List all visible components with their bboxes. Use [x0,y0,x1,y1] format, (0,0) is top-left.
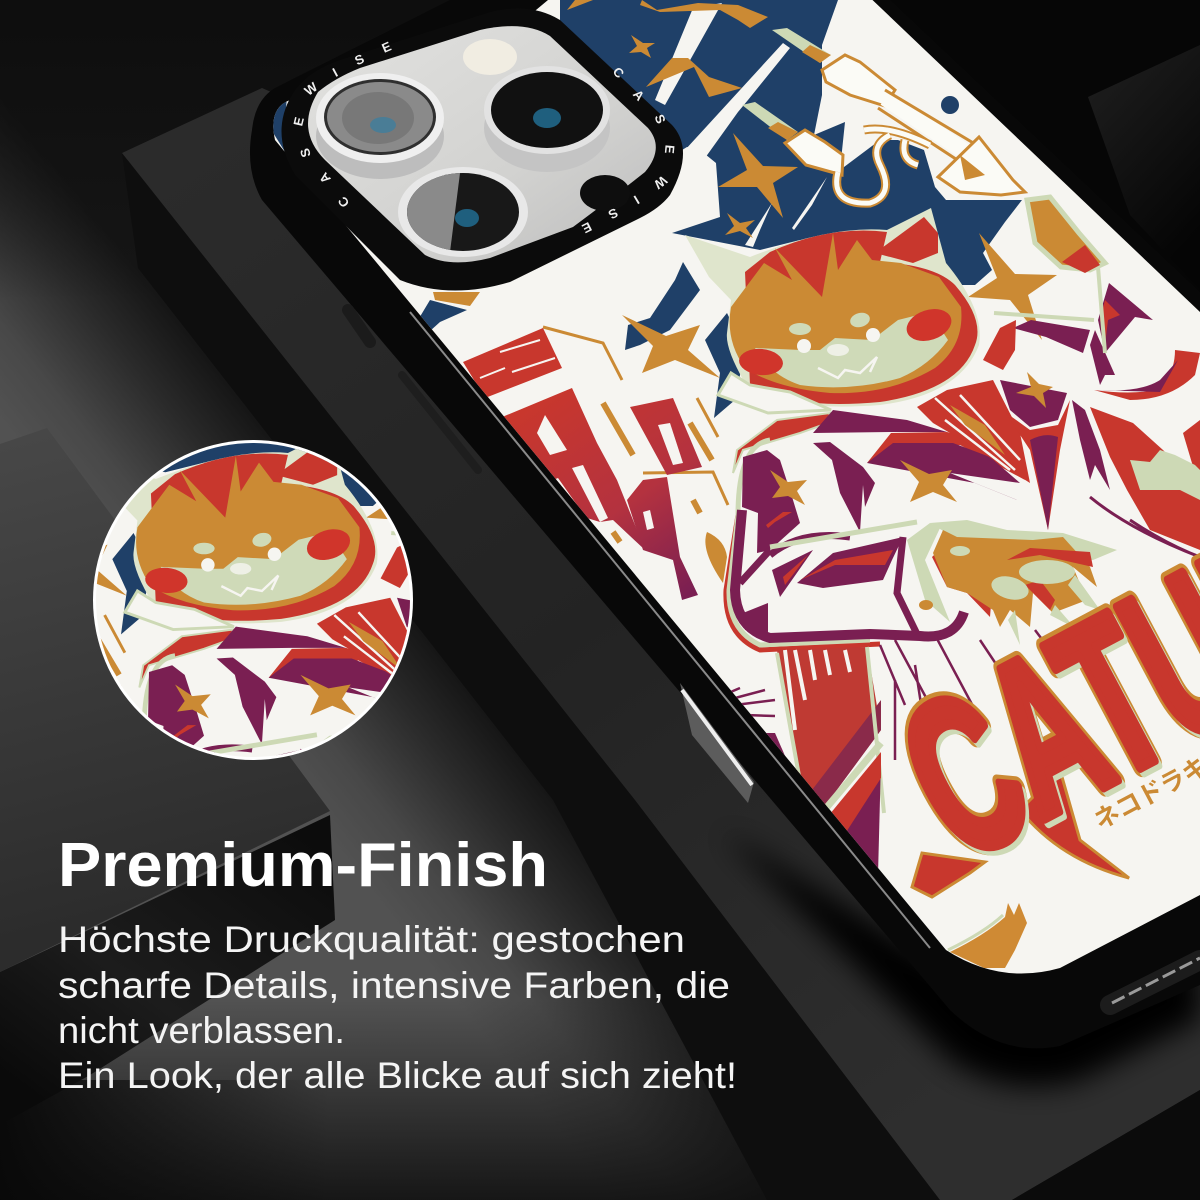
lower step top [0,428,330,972]
side button highlight [682,690,752,785]
cuff line [897,537,917,634]
lens right [484,66,610,172]
hand red fingers [1007,548,1093,610]
sleeve top right [1027,197,1105,270]
castle lower wall [495,388,645,550]
wing star [900,460,957,502]
bottom shading [0,1000,1200,1200]
castle red top [463,328,562,398]
chest red [1005,400,1070,530]
arm cream outline [729,440,870,645]
purple side strip [1072,400,1110,490]
curl navy hole [941,96,959,114]
magnifier circle [0,221,818,1196]
arch [537,415,567,455]
forearm [797,537,903,588]
tower slot [658,423,683,465]
castle [463,327,728,600]
hand red [932,540,993,617]
ribbon purple [1095,360,1178,392]
lower step front [0,815,335,1125]
action button [348,310,370,342]
orange band under island [433,292,480,306]
phone [250,0,1200,1015]
cream face [755,312,948,387]
brand text left: CASEWISE [294,42,392,207]
printed artwork [260,0,1200,1000]
top shading [0,0,1200,300]
ribbons [837,129,930,203]
cat head [685,208,980,407]
hand cream patches [950,546,1100,645]
island glass [308,26,656,262]
wall slits [556,465,608,522]
chest purple [1000,380,1067,427]
ribbon [1094,350,1200,400]
head outline with ears [685,208,980,407]
skirt purple left [745,733,800,790]
brand text right: CASEWISE [582,68,674,234]
sleeve star [770,470,807,505]
candles [742,28,831,140]
upper arm purple [742,450,800,553]
C tail [912,853,985,897]
navy blades beside head [625,262,745,418]
left bottom shading [0,1080,330,1200]
goblets [785,55,895,175]
arm red accent [766,512,792,528]
cream diagonal [822,743,881,813]
collar [718,373,831,413]
skirt rays [880,610,1135,760]
navy left patch [267,97,467,340]
frame highlight line [410,312,930,948]
charging port [1110,958,1200,1005]
white base [260,0,1200,1000]
right block top [1088,45,1200,290]
sleeve center [813,442,875,532]
sleeve red [1062,245,1100,273]
purple wing [867,443,1037,508]
red fringe [983,320,1016,370]
eyes [789,311,880,353]
orange drips [567,0,768,97]
hand cream top [930,520,1117,560]
gold blob [705,532,727,583]
silver side button [680,683,754,803]
elbow red [783,555,808,585]
heading: Premium-Finish [58,831,548,900]
title lettering [867,448,1200,909]
flash [463,39,517,75]
red wing [867,432,1025,480]
orange fur [730,233,961,393]
body text [58,919,737,1096]
cape lines [1090,497,1200,557]
candelabra [742,28,1025,203]
shoulder purple [813,410,947,433]
candelabra base [938,137,1025,195]
skirt purple right [843,760,881,875]
elbow triangle [743,603,768,632]
elbow inner [772,550,813,597]
candle ends [768,45,831,140]
A tail [1020,770,1129,878]
feather detail [935,395,1020,470]
whiskers left [712,688,775,716]
arm folds [740,535,850,583]
bottom right dark corner [1012,1090,1200,1200]
lens bottom [398,167,528,257]
stars [622,35,1057,378]
tower [630,398,702,475]
camera island [282,10,683,290]
upper arm red [733,413,830,473]
body text: Höchste Druckqualität: gestochen [58,919,685,960]
mouth [818,357,877,378]
red diagonal [825,752,881,837]
forearm cream top [770,522,917,547]
cuff dot [919,600,933,610]
purple spike right [1098,283,1153,353]
forearm red [800,550,893,580]
left cheek [738,347,784,377]
tail cream line [948,915,1003,950]
stem [880,94,893,108]
gold bars [603,403,712,542]
brick lines [480,340,555,378]
skirt cream edges [777,647,884,813]
magnifier white disc [93,440,413,760]
cape red [1090,407,1200,550]
white paint strips [655,3,827,247]
arm purple outline [735,510,964,638]
feather hand [917,380,1030,483]
nose [827,344,849,356]
small purple spike [1090,330,1115,385]
feather gold [950,405,1005,455]
upper purple wing right [1013,320,1090,353]
small star on chest [1016,372,1053,408]
phone shadow [720,830,1200,1087]
navy night sky [560,0,1022,285]
body text: scharfe Details, intensive Farben, die [58,965,730,1006]
base details [960,155,985,180]
ruin [627,477,698,600]
red diamond [1183,420,1200,490]
hand orange [933,530,1097,627]
ruin window [643,510,654,530]
arm red outline [726,515,880,650]
platform dark side [122,153,940,1200]
cream arm line [994,267,1105,353]
case body [250,0,1200,1048]
cuff cream [907,523,950,622]
body text: nicht verblassen. [58,1010,345,1051]
skirt hatch purple [812,700,881,810]
right ear red [875,217,938,263]
top right dark backdrop [700,0,1200,1200]
tail brush [950,903,1027,968]
microphone [580,175,630,211]
island outer ring [282,8,683,291]
volume button [402,375,478,470]
chest purple blade [1030,435,1058,530]
lens upper left [316,73,444,179]
magnified artwork [0,221,818,1196]
cream hand right [1130,450,1200,500]
hair red [745,231,978,404]
skirt white rays [785,650,850,730]
red spike [1100,300,1120,345]
right cheek [902,304,956,346]
skirt hatch [777,647,881,810]
gold outlines [543,327,728,505]
body text: Ein Look, der alle Blicke auf sich zieht! [58,1055,737,1096]
